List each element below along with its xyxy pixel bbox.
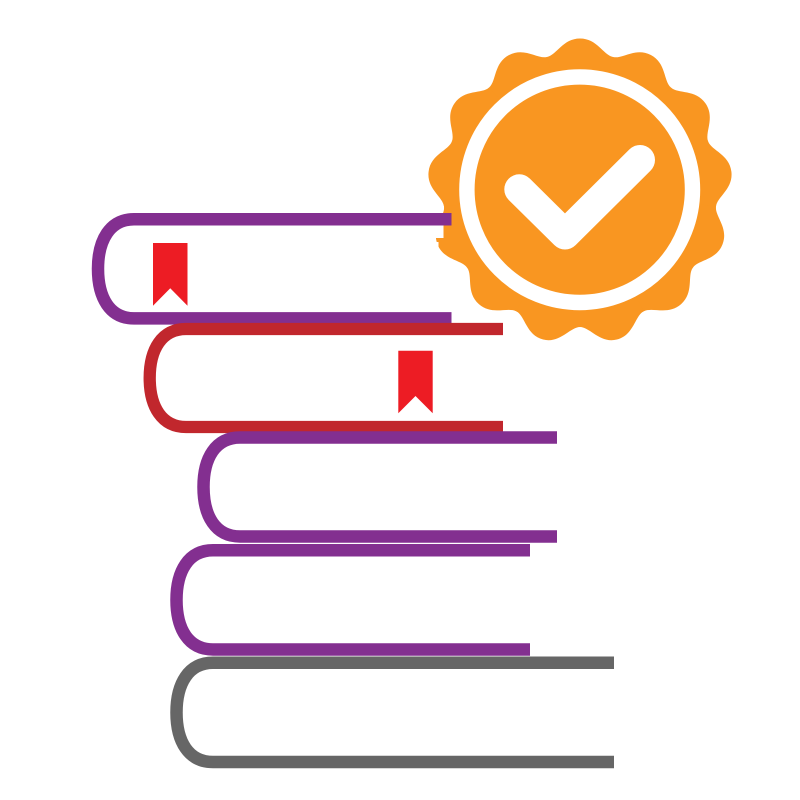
- book 1 cover: [98, 219, 452, 318]
- book 1: purple, top of stack: [98, 219, 452, 318]
- check mark: [519, 160, 640, 234]
- book 2: red: [150, 329, 503, 427]
- book 2 cover: [150, 329, 503, 427]
- badge white ring: [467, 77, 692, 302]
- badge scalloped edge: [425, 38, 735, 347]
- book 1 red bookmark: [153, 243, 188, 306]
- badge edge cut-out beside top book: [425, 225, 444, 256]
- icon: orange approval badge with check mark: [425, 38, 735, 347]
- book 5: gray, bottom of stack: [176, 663, 614, 762]
- book 2 red bookmark: [398, 351, 433, 413]
- book 3: purple: [204, 438, 557, 536]
- book 4: purple: [176, 550, 530, 650]
